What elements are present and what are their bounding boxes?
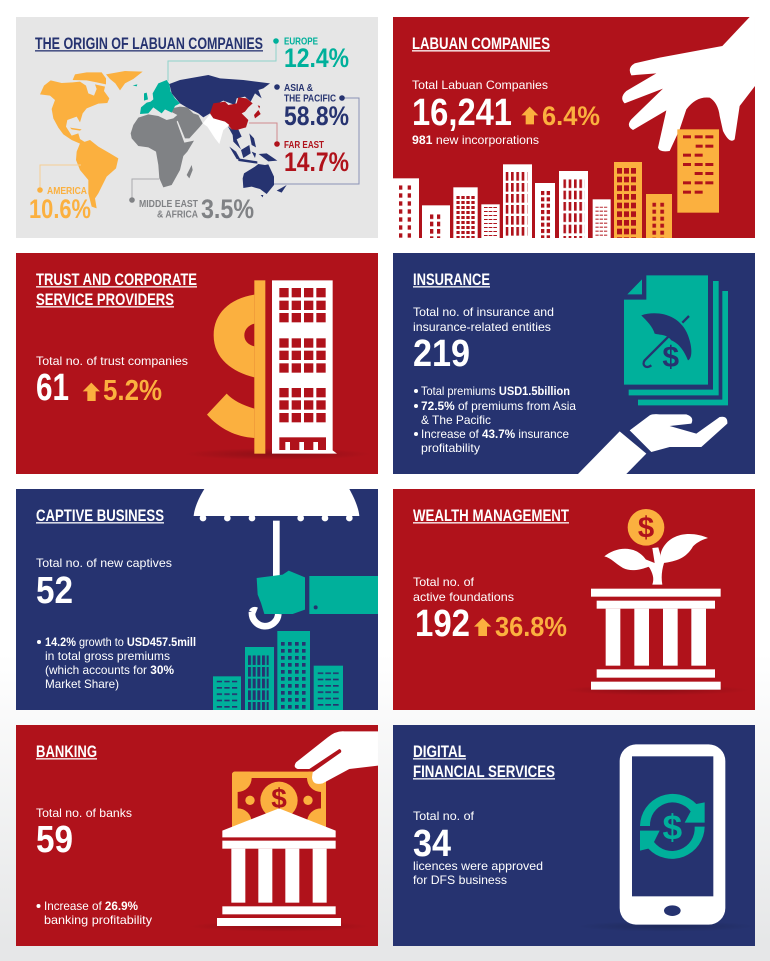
illustration: banknote entering bank: $	[271, 783, 287, 814]
illustration: plant growing from pillared building: $	[638, 511, 654, 544]
insurance bullet list: Increase of 43.7% insurance	[421, 428, 569, 441]
heading: trust and corporate service providers: SERVICE PROVIDERS	[36, 291, 174, 309]
illustration: city buildings	[393, 162, 672, 238]
callout: Middle East and Africa: & AFRICA	[157, 208, 198, 220]
heading: banking: BANKING	[36, 743, 97, 761]
captive bullet text: (which accounts for 30%	[45, 664, 174, 677]
label: insurance entities: Total no. of insurance and	[413, 306, 554, 319]
illustration: open hand	[578, 414, 727, 474]
label: trust companies: Total no. of trust companies	[36, 355, 188, 368]
callout: America	[29, 185, 91, 224]
number: 61: 61	[36, 367, 69, 409]
label: active foundations: Total no. of	[413, 576, 475, 589]
label: total no. of: Total no. of	[413, 810, 475, 823]
heading: Labuan companies: LABUAN COMPANIES	[412, 35, 550, 53]
illustration: hand holding umbrella	[194, 489, 378, 626]
illustration: insurance documents with umbrella: $	[662, 341, 679, 374]
label: new captives: Total no. of new captives	[36, 557, 172, 570]
insurance bullet list: & The Pacific	[421, 414, 491, 427]
growth 36.8%: 36.8%	[495, 611, 567, 642]
callout: Asia and the Pacific	[274, 82, 349, 131]
captive bullet text	[37, 636, 196, 691]
callout: Far East: 14.7%	[284, 147, 349, 177]
icon: up arrow	[83, 383, 100, 401]
illustration: hand dropping banknote	[295, 731, 378, 784]
heading: wealth management: WEALTH MANAGEMENT	[413, 507, 569, 525]
callout: America: AMERICA	[47, 185, 87, 197]
heading: insurance: INSURANCE	[413, 271, 490, 289]
illustration: hand lifting a building	[622, 17, 755, 213]
heading: trust and corporate service providers	[36, 271, 197, 309]
captive bullet text: Market Share)	[45, 678, 119, 691]
licences text	[413, 860, 543, 887]
callout lines	[40, 41, 359, 200]
illustration: smartphone with currency exchange icon	[576, 744, 756, 932]
insurance bullet list	[414, 385, 577, 455]
growth 5.2%: 5.2%	[103, 375, 162, 407]
label: insurance entities: insurance-related entities	[413, 321, 551, 334]
label: active foundations: active foundations	[413, 591, 514, 604]
captive bullet text: in total gross premiums	[45, 650, 170, 663]
callout: Middle East and Africa	[129, 194, 254, 224]
illustration: teal city buildings	[213, 631, 343, 710]
growth 6.4%: 6.4%	[542, 101, 600, 131]
panel: captive business	[16, 489, 378, 710]
label: insurance entities	[413, 306, 554, 334]
illustration: plant growing from pillared building	[563, 509, 750, 695]
panel: insurance	[393, 253, 755, 474]
panel: Labuan companies	[393, 17, 755, 238]
icon: up arrow	[521, 107, 538, 124]
heading: origin of Labuan companies: THE ORIGIN OF LABUAN COMPANIES	[35, 35, 263, 53]
illustration: insurance documents with umbrella	[624, 275, 728, 405]
panel: trust and corporate service providers	[16, 253, 378, 474]
label: active foundations	[413, 576, 514, 604]
panel: wealth management	[393, 489, 755, 710]
heading: digital financial services: FINANCIAL SERVICES	[413, 763, 555, 781]
icon: up arrow	[474, 618, 491, 636]
number: 34: 34	[413, 823, 451, 865]
illustration: banknote entering bank	[211, 772, 348, 930]
panel: banking	[16, 725, 378, 946]
banking bullet text: banking profitability	[44, 914, 152, 927]
banking bullet text	[36, 900, 152, 927]
number: 16,241: 16,241	[412, 92, 512, 134]
captive bullet text: 14.2% growth to USD457.5mill	[45, 636, 196, 649]
new incorporations: 981 new incorporations	[412, 134, 539, 147]
number: 52: 52	[36, 570, 73, 612]
licences text: licences were approved	[413, 860, 543, 873]
label: banks: Total no. of banks	[36, 807, 132, 820]
callout: Far East	[274, 139, 349, 177]
label: total Labuan companies: Total Labuan Companies	[412, 79, 548, 92]
callout: Asia and the Pacific: 58.8%	[284, 101, 349, 131]
illustration: dollar sign and office tower	[184, 280, 371, 460]
callout: Middle East and Africa: MIDDLE EAST	[139, 198, 198, 210]
callout: Middle East and Africa: 3.5%	[201, 194, 254, 224]
callout: Asia and the Pacific: THE PACIFIC	[284, 92, 336, 104]
insurance bullet list: 72.5% of premiums from Asia	[421, 400, 577, 413]
callout: Europe: EUROPE	[284, 36, 318, 48]
world map	[40, 71, 287, 208]
licences text: for DFS business	[413, 874, 507, 887]
insurance bullet list: profitability	[421, 442, 480, 455]
callout: Europe: 12.4%	[284, 43, 349, 73]
callout: Europe	[273, 36, 349, 73]
number: 219: 219	[413, 333, 470, 375]
callout: Far East: FAR EAST	[284, 139, 324, 151]
heading: digital financial services	[413, 743, 555, 781]
callout: America: 10.6%	[29, 194, 91, 224]
number: 192: 192	[415, 603, 470, 645]
heading: trust and corporate service providers: TRUST AND CORPORATE	[36, 271, 197, 289]
heading: captive business: CAPTIVE BUSINESS	[36, 507, 164, 525]
callout: Asia and the Pacific: ASIA &	[284, 82, 313, 94]
heading: digital financial services: DIGITAL	[413, 743, 466, 761]
panel: digital financial services	[393, 725, 756, 946]
illustration: smartphone with currency exchange icon: $	[663, 809, 683, 848]
panel: origin of Labuan companies	[16, 17, 378, 238]
banking bullet text: Increase of 26.9%	[44, 900, 138, 913]
insurance bullet list: Total premiums USD1.5billion	[421, 385, 570, 398]
number: 59: 59	[36, 819, 73, 861]
